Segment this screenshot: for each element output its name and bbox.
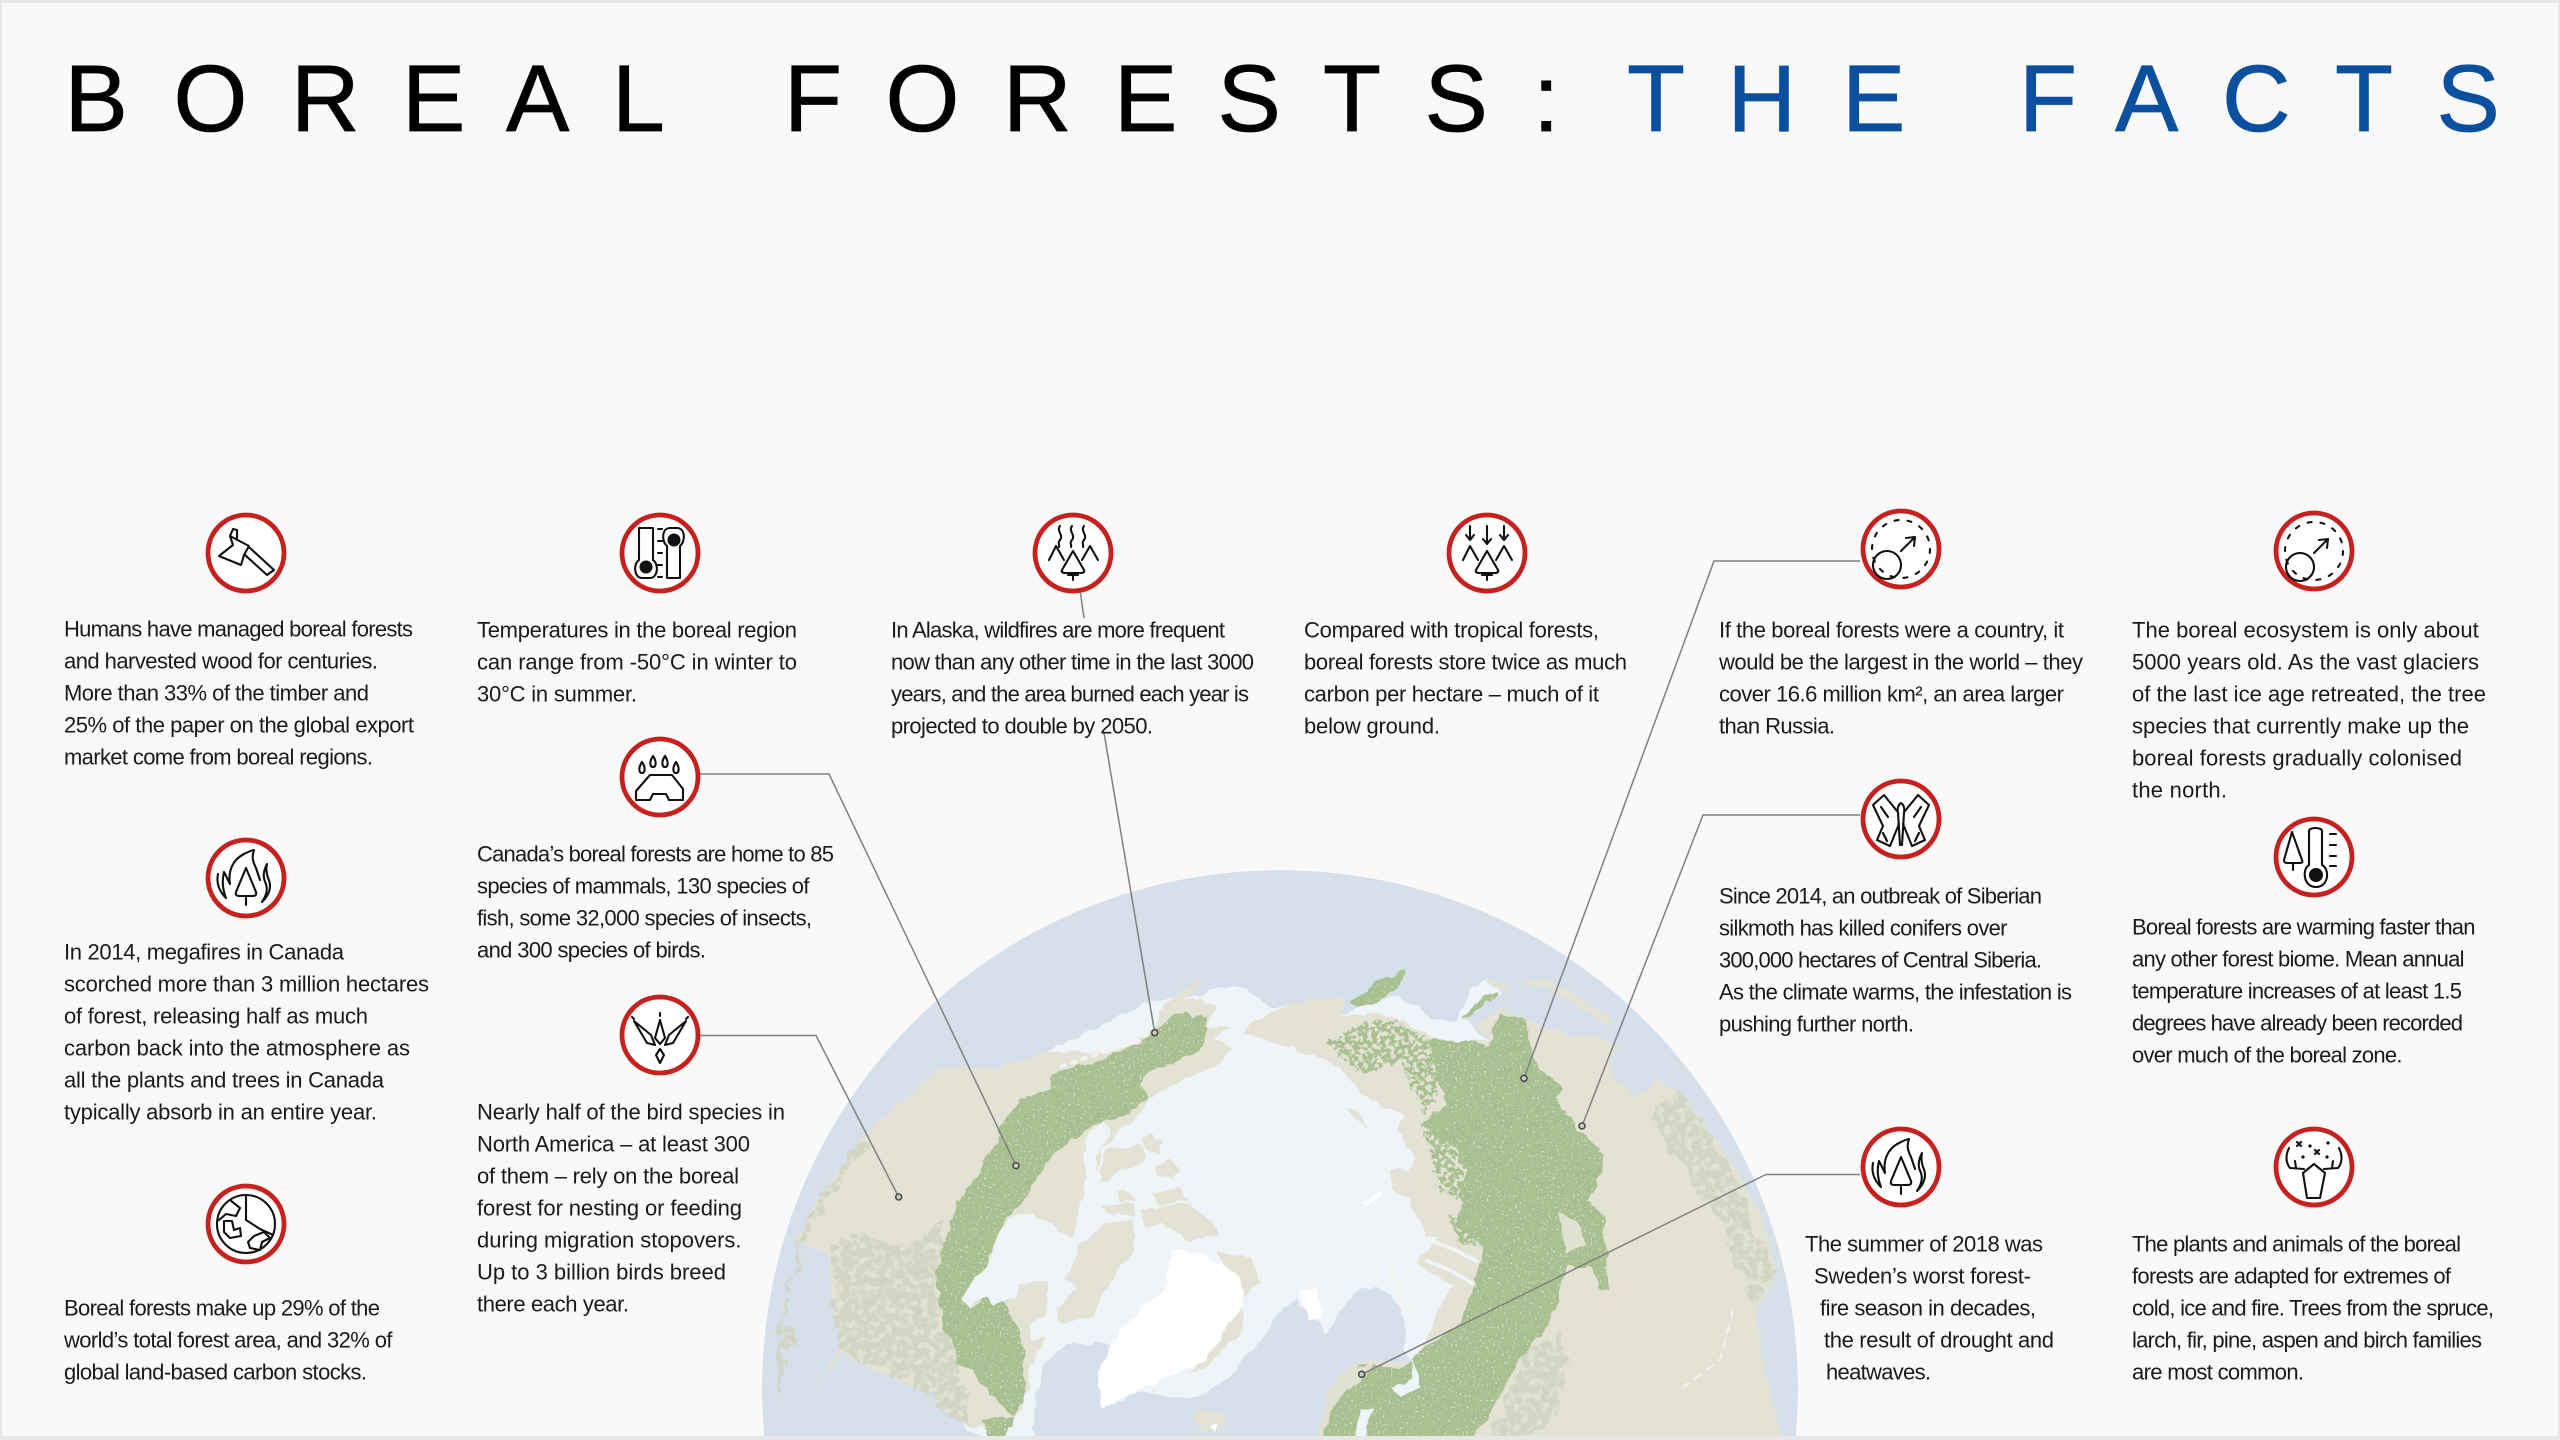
text: Sweden fire season: the result of drought and bbox=[1824, 1328, 2054, 1353]
text: bird species bbox=[477, 1100, 785, 1317]
patchy forest-tundra, Siberia bbox=[1327, 1020, 1480, 1245]
text: bird species: Up to 3 billion birds breed bbox=[477, 1260, 726, 1285]
text: largest country: cover 16.6 million km², an area larger bbox=[1719, 682, 2064, 707]
icon: moose with snow bbox=[2276, 1129, 2352, 1205]
leader line: bird species bbox=[700, 1036, 902, 1200]
text: Canada's species bbox=[477, 842, 834, 963]
text: largest country: than Russia. bbox=[1719, 714, 1835, 739]
text: share of forest area: global land-based carbon stocks. bbox=[64, 1360, 367, 1385]
text: carbon compared with tropical forests: carbon per hectare – much of it bbox=[1304, 682, 1599, 707]
text: temperature range: Temperatures in the boreal region bbox=[477, 618, 797, 643]
text: plants and animals: cold, ice and fire. Trees from the spruce, bbox=[2132, 1296, 2494, 1321]
text: age of the ecosystem bbox=[2132, 618, 2486, 803]
text: megafires in Canada: typically absorb in an entire year. bbox=[64, 1100, 377, 1125]
text: Alaska wildfires: In Alaska, wildfires are more frequent bbox=[891, 618, 1225, 643]
map: northern hemisphere globe showing boreal forest bbox=[762, 870, 1798, 1440]
icon: species drops and paw bbox=[622, 739, 698, 815]
text: Siberian silkmoth: As the climate warms, the infestation is bbox=[1719, 980, 2072, 1005]
text: bird species: North America – at least 300 bbox=[477, 1132, 750, 1157]
text: megafires in Canada: all the plants and trees in Canada bbox=[64, 1068, 385, 1093]
text: carbon compared with tropical forests: boreal forests store twice as much bbox=[1304, 650, 1627, 675]
text: Sweden fire season bbox=[1805, 1232, 2054, 1385]
text: warming: over much of the boreal zone. bbox=[2132, 1043, 2402, 1068]
text: warming: Boreal forests are warming faster than bbox=[2132, 915, 2476, 940]
text: humans and timber: More than 33% of the timber and bbox=[64, 681, 369, 706]
text: share of forest area bbox=[63, 1296, 393, 1385]
text: largest country: If the boreal forests were a country, it bbox=[1719, 618, 2064, 643]
text: Alaska wildfires: now than any other time in the last 3000 bbox=[891, 650, 1254, 675]
icon: heat over trees bbox=[1035, 515, 1111, 591]
text: temperature range: can range from -50°C in winter to bbox=[477, 650, 797, 675]
text: Siberian silkmoth: silkmoth has killed conifers over bbox=[1719, 916, 2008, 941]
title: FORESTS: bbox=[784, 46, 1559, 152]
text: share of forest area: world’s total forest area, and 32% of bbox=[63, 1328, 393, 1353]
text: bird species: Nearly half of the bird species in bbox=[477, 1100, 785, 1125]
text: temperature range bbox=[477, 618, 797, 707]
text: plants and animals bbox=[2132, 1232, 2494, 1385]
icon: axe bbox=[208, 515, 284, 591]
text: Siberian silkmoth: Since 2014, an outbreak of Siberian bbox=[1719, 884, 2042, 909]
text: Sweden fire season: Sweden’s worst forest- bbox=[1814, 1264, 2031, 1289]
icon: globe scale with arrow (country) bbox=[1863, 511, 1939, 587]
text: bird species: during migration stopovers. bbox=[477, 1228, 742, 1253]
leader line: largest country bbox=[1521, 561, 1860, 1081]
text: megafires in Canada: carbon back into the atmosphere as bbox=[64, 1036, 410, 1061]
icon: tree on fire bbox=[208, 840, 284, 916]
text: megafires in Canada: scorched more than 3 million hectares bbox=[64, 972, 429, 997]
text: Siberian silkmoth bbox=[1719, 884, 2072, 1037]
icon: globe bbox=[208, 1186, 284, 1262]
icon: hot and cold thermometers bbox=[622, 515, 698, 591]
Hudson Bay, gulfs and inland water bbox=[962, 1120, 1420, 1440]
text: largest country: would be the largest in the world – they bbox=[1718, 650, 2083, 675]
text: humans and timber: and harvested wood for centuries. bbox=[64, 649, 378, 674]
text: humans and timber: Humans have managed boreal forests bbox=[64, 617, 413, 642]
text: megafires in Canada: of forest, releasing half as much bbox=[64, 1004, 368, 1029]
text: warming bbox=[2132, 915, 2476, 1068]
Greenland ice sheet bbox=[1097, 1190, 1383, 1432]
text: megafires in Canada: In 2014, megafires in Canada bbox=[64, 940, 345, 965]
text: humans and timber: market come from boreal regions. bbox=[64, 745, 373, 770]
text: warming: degrees have already been recorded bbox=[2132, 1011, 2463, 1036]
text: Alaska wildfires: projected to double by 2050. bbox=[891, 714, 1153, 739]
text: Alaska wildfires: years, and the area burned each year is bbox=[891, 682, 1249, 707]
icon: globe scale with arrow (age) bbox=[2276, 513, 2352, 589]
text: age of the ecosystem: of the last ice age retreated, the tree bbox=[2132, 682, 2486, 707]
text: plants and animals: are most common. bbox=[2132, 1360, 2304, 1385]
text: carbon compared with tropical forests: Compared with tropical forests, bbox=[1304, 618, 1599, 643]
text: age of the ecosystem: The boreal ecosystem is only about bbox=[2132, 618, 2479, 643]
title bbox=[64, 46, 2500, 152]
icon: silkmoth bbox=[1863, 781, 1939, 857]
ocean bay bbox=[979, 1409, 997, 1427]
title: FACTS bbox=[2019, 46, 2500, 152]
text: largest country bbox=[1718, 618, 2083, 739]
icon: tree and thermometer bbox=[2276, 819, 2352, 895]
title: BOREAL bbox=[64, 46, 665, 152]
text: carbon compared with tropical forests: below ground. bbox=[1304, 714, 1440, 739]
text: Canada's species: Canada’s boreal forests are home to 85 bbox=[477, 842, 834, 867]
temperate land shading bbox=[775, 1093, 1773, 1440]
title: THE bbox=[1627, 46, 1905, 152]
text: temperature range: 30°C in summer. bbox=[477, 682, 637, 707]
text: age of the ecosystem: species that currently make up the bbox=[2132, 714, 2469, 739]
text: plants and animals: The plants and animals of the boreal bbox=[2132, 1232, 2461, 1257]
text: bird species: there each year. bbox=[477, 1292, 629, 1317]
text: Siberian silkmoth: 300,000 hectares of Central Siberia. bbox=[1719, 948, 2042, 973]
text: carbon compared with tropical forests bbox=[1304, 618, 1627, 739]
text: Canada's species: fish, some 32,000 species of insects, bbox=[477, 906, 812, 931]
text: Alaska wildfires bbox=[891, 618, 1254, 739]
Scandinavian mountains and forest gaps bbox=[1317, 1210, 1590, 1440]
text: Canada's species: and 300 species of birds. bbox=[477, 938, 706, 963]
text: plants and animals: forests are adapted for extremes of bbox=[2132, 1264, 2452, 1289]
boreal forest, North America bbox=[935, 1013, 1208, 1440]
leader line: Sweden fire season bbox=[1359, 1174, 1860, 1377]
text: plants and animals: larch, fir, pine, aspen and birch families bbox=[2132, 1328, 2482, 1353]
text: Sweden fire season: heatwaves. bbox=[1826, 1360, 1931, 1385]
text: megafires in Canada bbox=[64, 940, 429, 1125]
text: warming: temperature increases of at least 1.5 bbox=[2132, 979, 2462, 1004]
snow on mountains bbox=[1060, 1030, 1733, 1387]
leader line: Siberian silkmoth bbox=[1579, 815, 1860, 1129]
text: warming: any other forest biome. Mean annual bbox=[2132, 947, 2464, 972]
text: bird species: forest for nesting or feeding bbox=[477, 1196, 742, 1221]
icon: tree on fire (Sweden) bbox=[1863, 1129, 1939, 1205]
boreal forest, Eurasia bbox=[1317, 970, 1610, 1440]
icon: carbon arrows into trees bbox=[1449, 515, 1525, 591]
text: Sweden fire season: fire season in decades, bbox=[1820, 1296, 2036, 1321]
text: humans and timber: 25% of the paper on the global export bbox=[64, 713, 414, 738]
text: age of the ecosystem: 5000 years old. As the vast glaciers bbox=[2132, 650, 2479, 675]
text: bird species: of them – rely on the boreal bbox=[477, 1164, 739, 1189]
text: Siberian silkmoth: pushing further north. bbox=[1719, 1012, 1914, 1037]
text: age of the ecosystem: the north. bbox=[2132, 778, 2227, 803]
leader line: Canada's species bbox=[700, 774, 1019, 1169]
leader line: Alaska wildfires bbox=[1080, 593, 1158, 1036]
icon: bird feathers bbox=[622, 997, 698, 1073]
text: Sweden fire season: The summer of 2018 was bbox=[1805, 1232, 2043, 1257]
text: share of forest area: Boreal forests make up 29% of the bbox=[64, 1296, 380, 1321]
text: Canada's species: species of mammals, 130 species of bbox=[477, 874, 810, 899]
text: humans and timber bbox=[64, 617, 414, 770]
text: age of the ecosystem: boreal forests gradually colonised bbox=[2132, 746, 2462, 771]
